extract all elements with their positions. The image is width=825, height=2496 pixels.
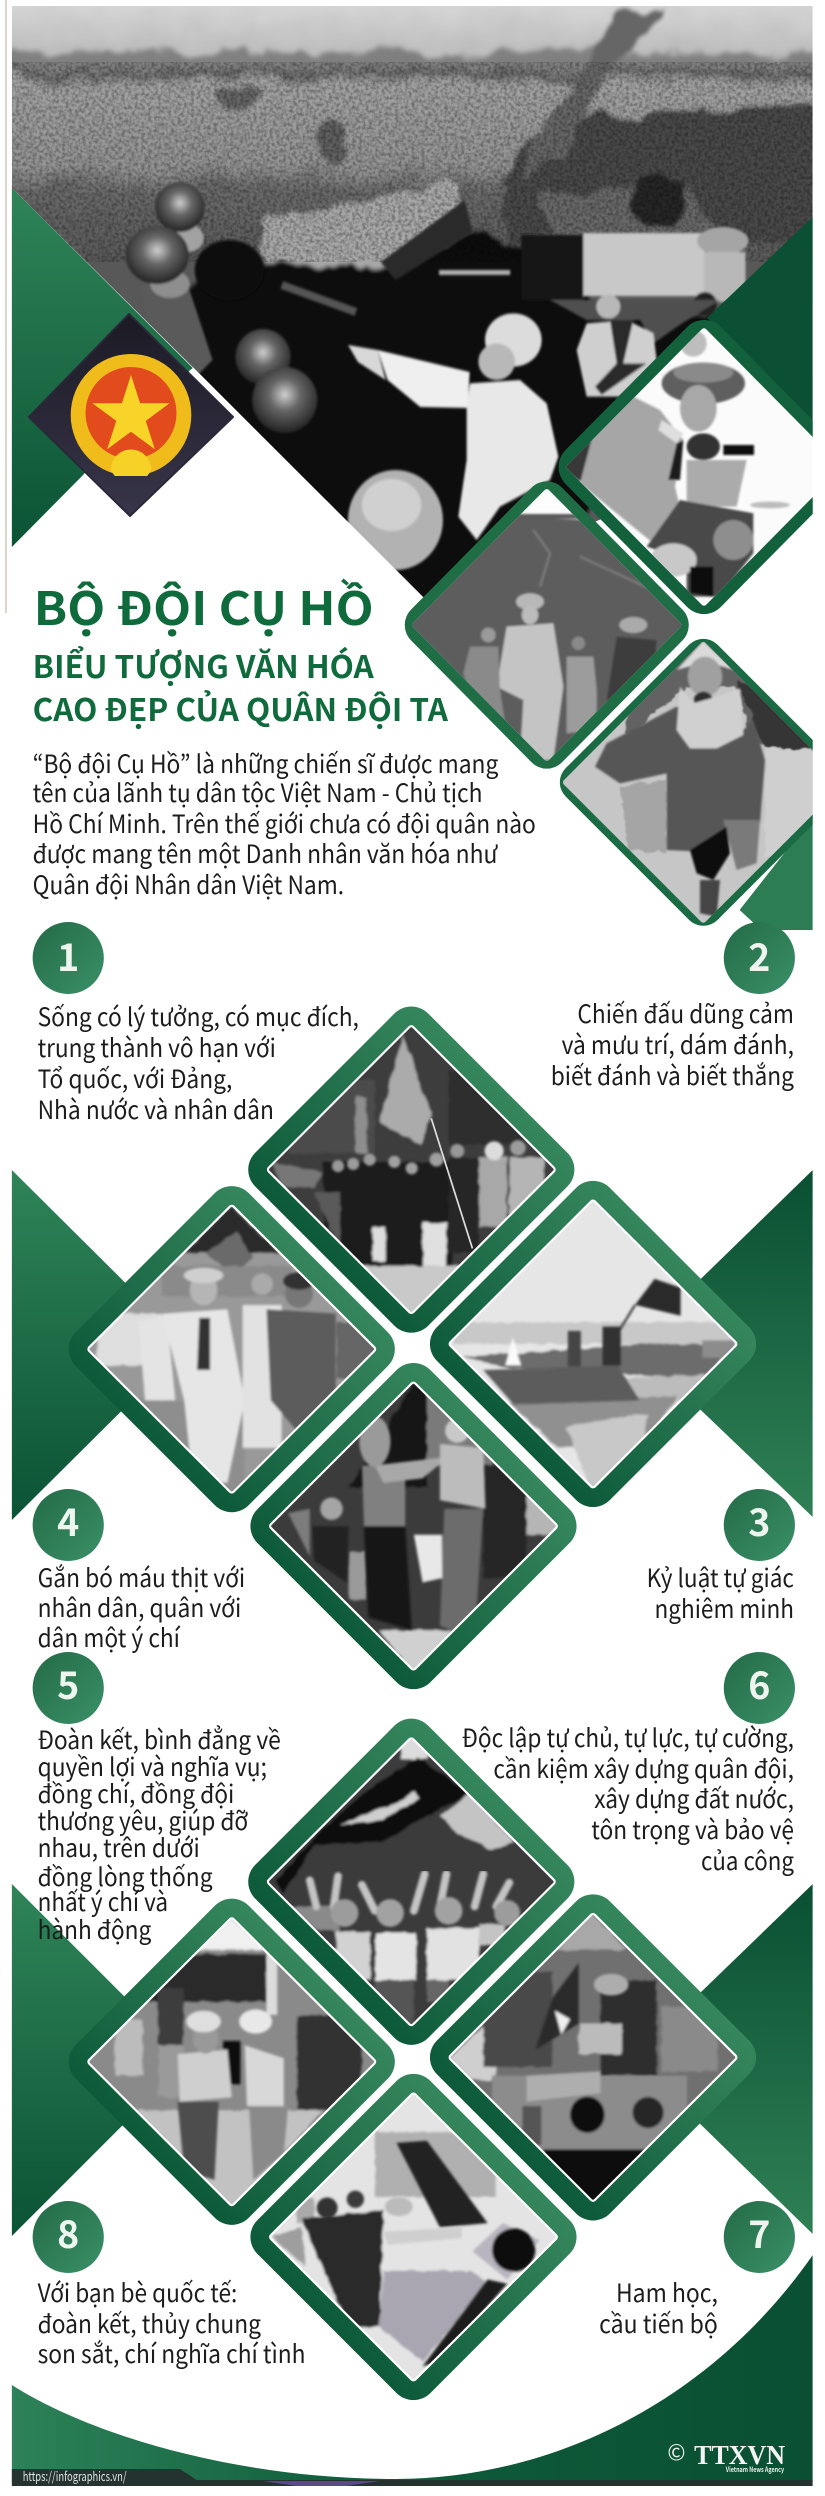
number badge 2: 2 [748, 927, 770, 982]
photo diamond 7 right: victory car [430, 1894, 756, 2220]
photo diamond: seated portrait [558, 320, 813, 614]
green triangle: top right [707, 217, 813, 432]
text item 6: Độc lập tự chủ, tự lực, tự cường, [462, 1719, 794, 1755]
text item 5: nhất ý chí và [38, 1883, 168, 1919]
text item 6: xây dựng đất nước, [594, 1780, 794, 1816]
subtitle: BIỂU TƯỢNG VĂN HÓA [33, 642, 374, 687]
photo diamond 5 top: raised fists [248, 1718, 574, 2045]
green triangle: section 1 right [633, 1170, 813, 1517]
intro text block: được mang tên một Danh nhân văn hóa như [33, 835, 498, 871]
text item 1: Sống có lý tưởng, có mục đích, [38, 998, 359, 1034]
text item 5: đồng chí, đồng đội [38, 1775, 234, 1811]
text item 7: cầu tiến bộ [599, 2305, 718, 2341]
text item 6: tôn trọng và bảo vệ [591, 1811, 794, 1847]
title [33, 573, 448, 730]
intro text block: tên của lãnh tụ dân tộc Việt Nam - Chủ tịch [33, 774, 483, 810]
text item 5: nhau, trên dưới [38, 1829, 200, 1865]
green triangle: section 1 left [12, 1170, 188, 1520]
photo diamond: walking through hills [404, 481, 689, 769]
text item 8: son sắt, chí nghĩa chí tình [38, 2335, 306, 2371]
photo diamond bottom: soldiers with cannon [250, 2074, 577, 2400]
intro text block [33, 745, 536, 902]
number badge 6: 6 [748, 1655, 770, 1710]
green triangle: section 2 right [633, 1884, 813, 2234]
green triangle: section 2 left [12, 1884, 188, 2236]
intro text block: Hồ Chí Minh. Trên thế giới chưa có đội quân nào [33, 805, 536, 841]
intro text block: Quân đội Nhân dân Việt Nam. [33, 866, 344, 902]
number badge 5: 5 [57, 1655, 79, 1710]
text item 5: thương yêu, giúp đỡ [38, 1802, 248, 1838]
photo diamond 8 left: handshake [68, 1898, 395, 2225]
text item 3 [647, 1559, 794, 1626]
text item 6: cần kiệm xây dựng quân đội, [493, 1750, 794, 1786]
photo diamond 4: walking with the people [68, 1186, 395, 1512]
number badge 5 [33, 1652, 104, 1724]
footer bar with url [12, 2466, 813, 2486]
text item 7: Ham học, [616, 2274, 718, 2310]
intro text block: “Bộ đội Cụ Hồ” là những chiến sĩ được mang [33, 745, 498, 781]
text item 5: đồng lòng thống [38, 1858, 213, 1894]
text item 1: Tổ quốc, với Đảng, [38, 1060, 232, 1096]
title: CAO ĐẸP CỦA QUÂN ĐỘI TA [33, 685, 448, 730]
bottom green crescent [12, 2255, 813, 2482]
text item 2: biết đánh và biết thắng [551, 1057, 794, 1093]
photo grid two [59, 1709, 766, 2410]
icon: dark diamond with army emblem [29, 314, 233, 516]
text item 6 [462, 1719, 794, 1878]
number badge 4 [33, 1489, 104, 1561]
text item 7 [599, 2274, 718, 2341]
number badge 3 [724, 1489, 795, 1561]
text item 1: trung thành vô hạn với [38, 1029, 276, 1065]
text item 8 [38, 2274, 306, 2371]
number badge 7: 7 [748, 2204, 770, 2259]
photo diamond 1: soldiers under flag [248, 1006, 574, 1333]
text item 5 [38, 1721, 281, 1947]
number badge 1 [33, 922, 104, 994]
text item 8: Với bạn bè quốc tế: [38, 2274, 237, 2310]
number badge 6 [724, 1652, 795, 1724]
text item 4: dân một ý chí [38, 1619, 181, 1655]
TTXVN logo: © [667, 2436, 685, 2467]
text item 5: hành động [38, 1911, 151, 1947]
text item 8: đoàn kết, thủy chung [38, 2305, 261, 2341]
text item 4: Gắn bó máu thịt với [38, 1559, 245, 1595]
footer bar with url: https://infographics.vn/ [23, 2466, 127, 2485]
text item 2: Chiến đấu dũng cảm [577, 995, 794, 1031]
text item 3: Kỷ luật tự giác [647, 1559, 794, 1595]
number badge 3: 3 [748, 1492, 770, 1547]
hero photo: Ho Chi Minh beside anti-aircraft gun [0, 0, 825, 620]
number badge 7 [724, 2201, 795, 2273]
number badge 8: 8 [57, 2204, 79, 2259]
text item 1 [38, 998, 359, 1127]
text item 4: nhân dân, quân với [38, 1589, 241, 1625]
text item 4 [38, 1559, 245, 1655]
title: BỘ ĐỘI CỤ HỒ [34, 573, 374, 639]
text item 2 [551, 995, 794, 1093]
text item 6: của công [701, 1842, 794, 1878]
text item 5: Đoàn kết, bình đẳng về [38, 1721, 281, 1757]
photo diamond: man with towel [560, 638, 813, 926]
number badge 1: 1 [57, 927, 79, 982]
TTXVN logo [667, 2436, 786, 2475]
text item 3: nghiêm minh [655, 1590, 794, 1626]
green triangle: top left [12, 188, 193, 547]
number badge 4: 4 [57, 1492, 79, 1547]
text item 1: Nhà nước và nhân dân [38, 1091, 274, 1127]
photo diamond 3: flag over Dien Bien Phu bunker [430, 1180, 756, 1507]
text item 2: và mưu trí, dám đánh, [562, 1026, 794, 1062]
number badge 2 [724, 922, 795, 994]
number badge 8 [33, 2201, 104, 2273]
text item 5: quyền lợi và nghĩa vụ; [38, 1748, 267, 1784]
TTXVN logo: TTXVN [694, 2440, 786, 2470]
photo grid one [59, 997, 766, 1699]
TTXVN logo: Vietnam News Agency [725, 2465, 784, 2475]
white panel behind title [12, 367, 425, 930]
photo diamond mid: woman greeting soldier [250, 1363, 577, 1690]
green triangle: right below portraits [740, 817, 813, 930]
